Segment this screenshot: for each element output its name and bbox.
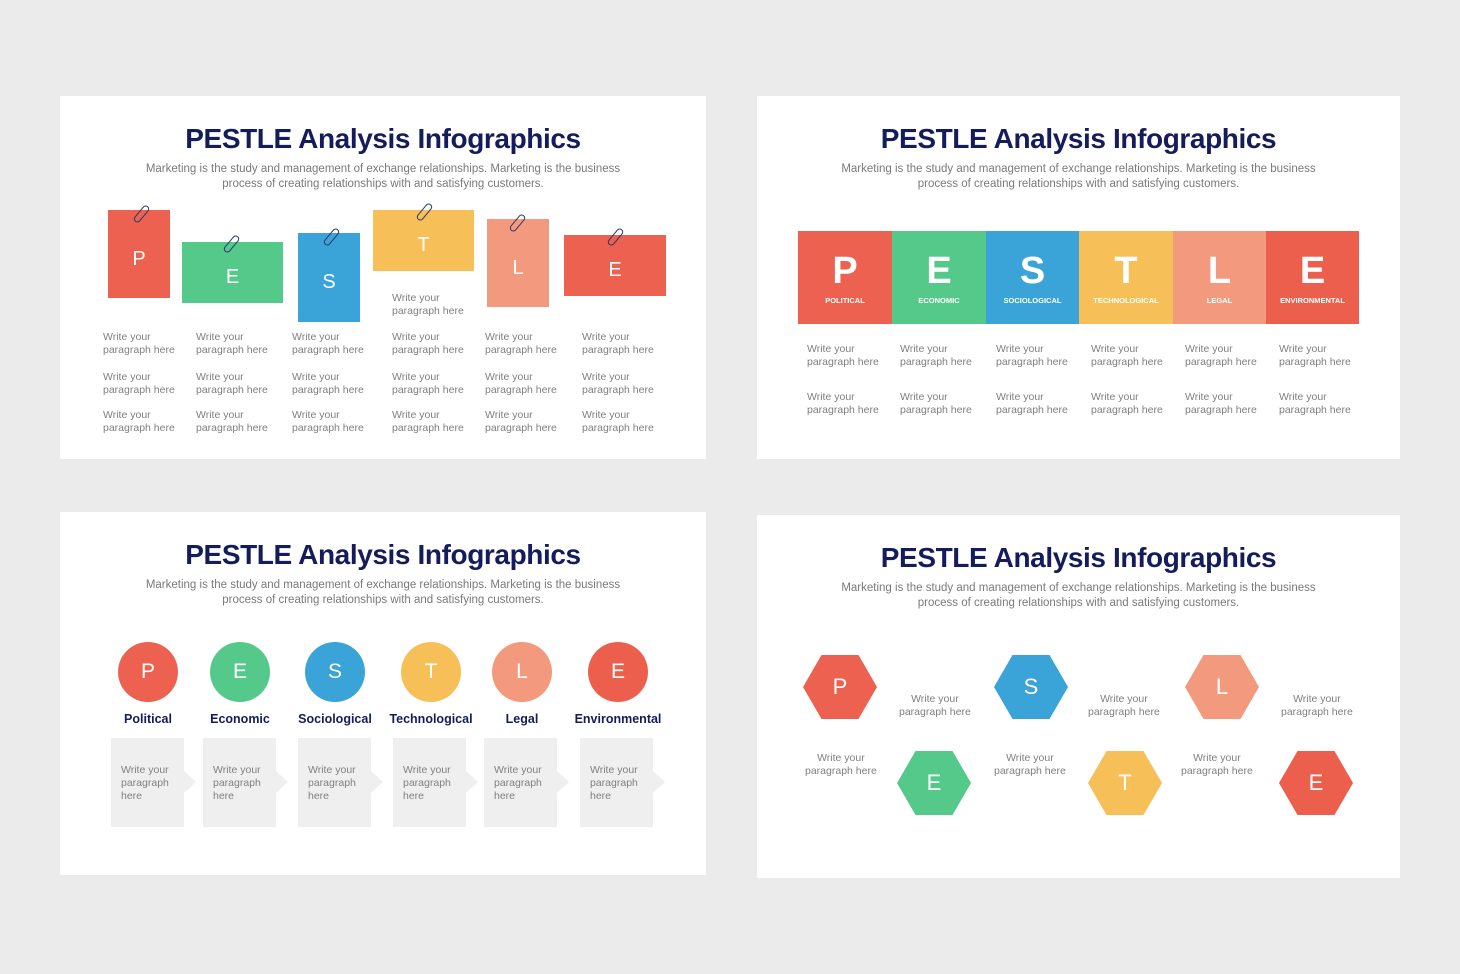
text under T [392,292,464,317]
text rows: Write your [1185,391,1233,403]
title: PESTLE Analysis Infographics [881,123,1276,154]
text boxes: Write your [494,764,542,776]
text rows: Write your [292,409,340,421]
text rows: paragraph here [582,384,654,396]
text rows: paragraph here [1091,404,1163,416]
text rows: paragraph here [807,356,879,368]
text rows: paragraph here [900,356,972,368]
text rows: Write your [485,331,533,343]
note E: E [226,266,239,288]
note S: S [322,271,336,293]
hex texts: paragraph here [899,706,971,718]
text rows: Write your [292,371,340,383]
text rows: Write your [582,371,630,383]
subtitle: process of creating relationships with and satisfying customers. [918,596,1239,608]
text rows: Write your [392,371,440,383]
note E2 [564,235,666,296]
text rows: paragraph here [196,384,268,396]
note E [182,242,283,303]
bar: TECHNOLOGICAL [1093,296,1159,305]
hex texts: paragraph here [1181,765,1253,777]
text rows: Write your [196,371,244,383]
labels: Technological [389,712,473,726]
text under T: Write your [392,292,440,304]
text rows: Write your [900,391,948,403]
bar: E [926,250,952,292]
text boxes: here [213,790,234,802]
text rows: Write your [807,343,855,355]
text boxes: here [590,790,611,802]
labels: Economic [210,712,270,726]
text rows: Write your [485,409,533,421]
circles: S [328,660,342,683]
note L: L [512,256,524,278]
text boxes: paragraph [403,777,451,789]
text rows: paragraph here [292,384,364,396]
note T [373,210,474,271]
subtitle: Marketing is the study and management of exchange relationships. Marketing is the business [841,582,1316,594]
text rows: paragraph here [1279,356,1351,368]
text rows: paragraph here [392,384,464,396]
text rows: paragraph here [996,404,1068,416]
text rows: paragraph here [1091,356,1163,368]
subtitle [146,163,620,190]
text rows: paragraph here [103,384,175,396]
hexagons: T [1118,770,1132,795]
hex texts: Write your [1006,752,1054,764]
title: PESTLE Analysis Infographics [185,123,581,154]
circles: L [516,660,528,683]
text rows: paragraph here [582,422,654,434]
circles [118,642,648,702]
bar: E [1300,250,1325,292]
bar: SOCIOLOGICAL [1004,296,1061,305]
subtitle: Marketing is the study and management of exchange relationships. Marketing is the business [146,163,620,175]
text rows: Write your [1185,343,1233,355]
text boxes: here [308,790,329,802]
panel: circles [60,512,706,875]
text rows: Write your [485,371,533,383]
labels [124,712,661,726]
text boxes: paragraph [494,777,542,789]
text rows: paragraph here [485,384,557,396]
note P [108,210,170,298]
note P: P [132,248,146,270]
text boxes: paragraph [590,777,638,789]
hex texts: Write your [1293,693,1341,705]
text rows: Write your [196,331,244,343]
hexagons [803,655,1353,815]
bar: S [1020,250,1045,292]
text rows: Write your [1091,391,1139,403]
text rows: paragraph here [807,404,879,416]
hexagons: S [1024,674,1038,699]
hex texts: paragraph here [1281,706,1353,718]
hex texts [805,693,1353,777]
subtitle: Marketing is the study and management of exchange relationships. Marketing is the business [841,163,1316,175]
text rows: Write your [392,409,440,421]
labels: Environmental [575,712,661,726]
bar: L [1208,250,1231,292]
subtitle: process of creating relationships with and satisfying customers. [222,594,544,606]
text rows [807,343,1351,416]
text boxes: Write your [308,764,356,776]
text boxes [111,738,664,827]
hex texts: paragraph here [994,765,1066,777]
text rows: Write your [900,343,948,355]
hex texts: Write your [1193,752,1241,764]
text boxes: Write your [590,764,638,776]
text rows: paragraph here [485,422,557,434]
hexagons: P [833,674,847,699]
circles: E [233,660,247,683]
subtitle: process of creating relationships with and satisfying customers. [918,178,1239,190]
subtitle [841,163,1316,190]
text boxes: paragraph [213,777,261,789]
text rows: Write your [103,409,151,421]
bar: P [832,250,858,292]
panel: sticky notes [60,96,706,459]
text boxes: here [121,790,142,802]
hexagons: E [927,770,941,795]
text rows: Write your [996,343,1044,355]
circles: T [425,660,437,683]
bar: T [1114,250,1138,292]
hexagons: E [1309,770,1323,795]
title: PESTLE Analysis Infographics [881,542,1276,573]
text rows: Write your [582,331,630,343]
hexagons: L [1216,674,1228,699]
text rows: paragraph here [292,422,364,434]
note T: T [417,234,430,256]
text rows: Write your [996,391,1044,403]
text rows: Write your [582,409,630,421]
text rows: Write your [103,331,151,343]
bar: LEGAL [1207,296,1232,305]
text rows: Write your [1091,343,1139,355]
text boxes: paragraph [308,777,356,789]
text rows: paragraph here [103,422,175,434]
text rows: paragraph here [1185,404,1257,416]
bar [798,231,1359,324]
text rows: Write your [807,391,855,403]
paperclips [134,204,624,252]
text rows: paragraph here [996,356,1068,368]
hex texts: paragraph here [1088,706,1160,718]
subtitle [841,582,1316,608]
text rows: Write your [292,331,340,343]
text rows: Write your [103,371,151,383]
bar: ENVIRONMENTAL [1280,296,1345,305]
note L [487,219,549,307]
note E2: E [608,259,622,281]
text under T: paragraph here [392,305,464,317]
text rows: paragraph here [392,344,464,356]
panel: color bar [757,96,1400,459]
circles: P [141,660,155,683]
text rows: paragraph here [1185,356,1257,368]
hex texts: Write your [1100,693,1148,705]
text rows: paragraph here [1279,404,1351,416]
text rows: paragraph here [196,422,268,434]
subtitle [146,579,620,606]
text rows: Write your [1279,391,1327,403]
hex texts: Write your [817,752,865,764]
text rows: paragraph here [103,344,175,356]
text rows: Write your [196,409,244,421]
text boxes: Write your [213,764,261,776]
bar: POLITICAL [825,296,865,305]
title: PESTLE Analysis Infographics [185,539,581,570]
labels: Political [124,712,172,726]
panel: hexagons [757,515,1400,878]
text rows: paragraph here [485,344,557,356]
text boxes: Write your [121,764,169,776]
text boxes: here [494,790,515,802]
circles: E [611,660,625,683]
text boxes: Write your [403,764,451,776]
note S [298,233,360,322]
labels: Legal [506,712,538,726]
text rows: paragraph here [392,422,464,434]
subtitle: process of creating relationships with and satisfying customers. [222,178,544,190]
text rows: paragraph here [582,344,654,356]
hex texts: paragraph here [805,765,877,777]
bar: ECONOMIC [918,296,960,305]
text rows: paragraph here [292,344,364,356]
text boxes: here [403,790,424,802]
text rows: paragraph here [196,344,268,356]
subtitle: Marketing is the study and management of exchange relationships. Marketing is the business [146,579,620,591]
text rows: Write your [1279,343,1327,355]
text rows: paragraph here [900,404,972,416]
hex texts: Write your [911,693,959,705]
text rows [103,331,654,434]
labels: Sociological [298,712,372,726]
text boxes: paragraph [121,777,169,789]
text rows: Write your [392,331,440,343]
